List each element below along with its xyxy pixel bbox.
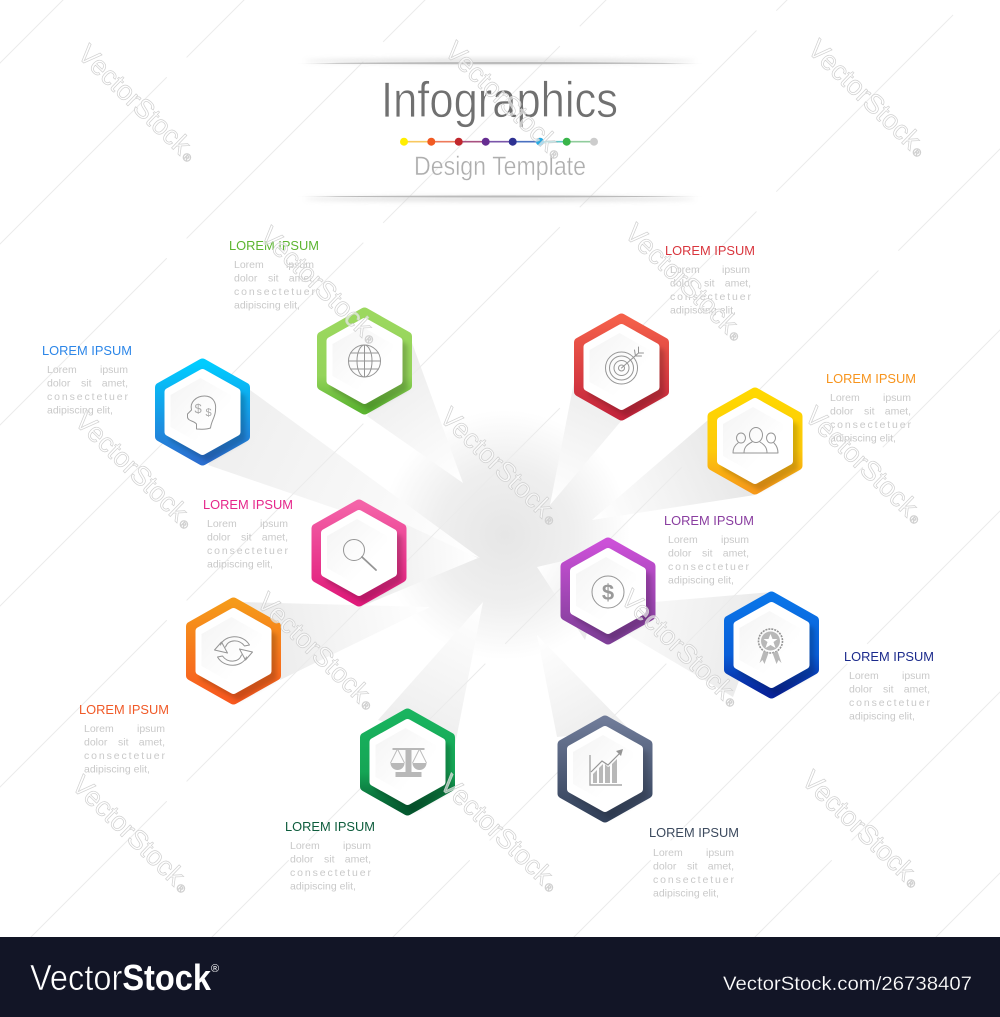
label: red: dolor	[670, 278, 694, 290]
footer logo: VectorStock	[30, 957, 212, 998]
label: purple	[664, 513, 754, 586]
label: navy: ipsum	[902, 670, 930, 682]
label: green: adipiscing elit,	[234, 300, 300, 312]
label: blue: amet,	[102, 378, 128, 390]
label: orange: ipsum	[137, 723, 165, 735]
label: orange: consectetuer	[84, 750, 166, 762]
label: dark green: amet,	[345, 854, 371, 866]
label: slate: adipiscing elit,	[653, 888, 719, 900]
label: purple: ipsum	[721, 534, 749, 546]
label: yellow: dolor	[830, 406, 854, 418]
watermarks: VectorStock®	[66, 770, 198, 898]
label: yellow: adipiscing elit,	[830, 432, 896, 444]
label: red	[665, 243, 755, 316]
label: orange: dolor	[84, 736, 108, 748]
label: green: consectetuer	[234, 286, 316, 298]
label: dark green: LOREM IPSUM	[285, 819, 375, 834]
label: green: ipsum	[286, 259, 314, 271]
hexagon: red, target	[579, 318, 664, 416]
watermarks: VectorStock®	[802, 34, 934, 162]
watermarks: VectorStock®	[615, 584, 747, 712]
top rule	[296, 58, 704, 64]
watermarks: VectorStock®	[434, 402, 566, 530]
label: yellow: LOREM IPSUM	[826, 371, 916, 386]
long shadows	[208, 340, 772, 745]
label: blue: ipsum	[100, 364, 128, 376]
hexagon: navy, medal	[729, 596, 814, 694]
label: red: Lorem	[670, 264, 700, 276]
label: pink	[203, 497, 293, 570]
label: red: ipsum	[722, 264, 750, 276]
hexagon: blue, money head	[160, 364, 245, 460]
label: pink: LOREM IPSUM	[203, 497, 293, 512]
label: slate: LOREM IPSUM	[649, 825, 739, 840]
label: orange: Lorem	[84, 723, 114, 735]
heading: Infographics: Infographics	[381, 72, 618, 128]
icon: people	[733, 428, 778, 453]
subheading: Design Template: Design Template	[414, 151, 586, 181]
label: navy: sit	[883, 684, 894, 696]
label: orange: adipiscing elit,	[84, 764, 150, 776]
label: blue: Lorem	[47, 364, 77, 376]
label: purple: adipiscing elit,	[668, 574, 734, 586]
label: purple: LOREM IPSUM	[664, 513, 754, 528]
label: pink: sit	[241, 532, 252, 544]
central shadow glow	[380, 410, 630, 660]
label: red: consectetuer	[670, 291, 752, 303]
label: slate: amet,	[708, 860, 734, 872]
label: yellow: amet,	[885, 406, 911, 418]
label: purple: sit	[702, 548, 713, 560]
watermarks: VectorStock®	[254, 221, 386, 349]
icon: head with dollars	[188, 396, 216, 429]
watermarks: VectorStock®	[69, 406, 201, 534]
label: pink: dolor	[207, 532, 231, 544]
icon: head with dollars: $	[194, 401, 202, 416]
icon: magnifier	[344, 540, 376, 570]
label: green: Lorem	[234, 259, 264, 271]
watermarks: VectorStock®	[796, 765, 928, 893]
footer id: VectorStock.com/26738407	[723, 974, 972, 995]
label: blue: dolor	[47, 378, 71, 390]
label: purple: consectetuer	[668, 561, 750, 573]
label: purple: dolor	[668, 548, 692, 560]
label: pink: consectetuer	[207, 545, 288, 557]
label: green: amet,	[289, 272, 315, 284]
label: blue: consectetuer	[47, 391, 128, 403]
label: dark green: Lorem	[290, 840, 320, 852]
label: yellow: sit	[864, 406, 875, 418]
label: navy	[844, 649, 934, 722]
label: orange: sit	[118, 736, 129, 748]
label: slate: ipsum	[706, 847, 734, 859]
label: navy: dolor	[849, 684, 873, 696]
label: pink: Lorem	[207, 518, 237, 530]
icon: target	[606, 347, 644, 384]
label: yellow	[826, 371, 916, 444]
label: orange	[79, 702, 169, 776]
label: purple: Lorem	[668, 534, 698, 546]
icon: growth chart	[590, 749, 623, 785]
label: blue	[42, 343, 132, 416]
watermarks	[66, 34, 934, 898]
watermarks: VectorStock®	[72, 39, 204, 167]
label: navy: LOREM IPSUM	[844, 649, 934, 664]
icon: medal	[758, 629, 782, 664]
registered mark: ®	[211, 963, 219, 975]
label: orange: LOREM IPSUM	[79, 702, 169, 717]
footer bar	[0, 937, 1000, 1017]
label: red: LOREM IPSUM	[665, 243, 755, 258]
hexagon: green, globe	[322, 312, 407, 410]
label: red: adipiscing elit,	[670, 304, 736, 316]
label: yellow: ipsum	[883, 392, 911, 404]
label: slate: Lorem	[653, 847, 683, 859]
watermarks: VectorStock®	[439, 36, 571, 164]
hexagon: yellow, people	[712, 392, 798, 490]
icon: head with dollars: $	[206, 407, 212, 419]
label: dark green	[285, 819, 375, 892]
watermarks: VectorStock®	[434, 769, 566, 897]
icon: scales	[390, 748, 426, 777]
colored dot line	[400, 138, 598, 146]
label: blue: adipiscing elit,	[47, 404, 113, 416]
bottom rule	[296, 196, 704, 202]
label: pink: ipsum	[260, 518, 288, 530]
label: yellow: Lorem	[830, 392, 860, 404]
label: slate	[649, 825, 739, 900]
label: navy: Lorem	[849, 670, 879, 682]
label: navy: amet,	[904, 684, 930, 696]
label: dark green: adipiscing elit,	[290, 880, 356, 892]
label: blue: LOREM IPSUM	[42, 343, 132, 358]
label: pink: adipiscing elit,	[207, 558, 273, 570]
label: pink: amet,	[262, 532, 288, 544]
label: blue: sit	[81, 378, 92, 390]
watermarks: VectorStock®	[251, 587, 383, 715]
hexagon: purple, dollar	[566, 542, 650, 640]
label: navy: adipiscing elit,	[849, 710, 915, 722]
label: green: sit	[268, 272, 279, 284]
label: orange: amet,	[139, 736, 165, 748]
label: slate: dolor	[653, 860, 677, 872]
label: dark green: sit	[324, 854, 335, 866]
title block	[296, 58, 704, 202]
label: dark green: dolor	[290, 854, 314, 866]
hexagon: pink, magnifier	[316, 504, 402, 602]
hexagon: orange, cycle	[191, 602, 276, 700]
label: red: sit	[704, 278, 715, 290]
label: green	[229, 238, 319, 312]
icon: cycle arrows	[214, 637, 252, 665]
label: green: LOREM IPSUM	[229, 238, 319, 253]
watermarks: VectorStock®	[619, 218, 751, 346]
label: dark green: consectetuer	[290, 867, 372, 879]
label: green: dolor	[234, 272, 258, 284]
label: slate: consectetuer	[653, 874, 734, 886]
hexagon: slate, growth chart	[562, 720, 648, 818]
label: slate: sit	[687, 860, 698, 872]
icon: globe	[348, 345, 380, 377]
watermarks: VectorStock®	[799, 401, 931, 529]
label: dark green: ipsum	[343, 840, 371, 852]
icon: dollar coin: $	[602, 580, 614, 605]
label: navy: consectetuer	[849, 697, 930, 709]
label: yellow: consectetuer	[830, 419, 912, 431]
label: red: amet,	[725, 278, 751, 290]
label: purple: amet,	[723, 548, 749, 560]
hexagon: dark green, scales	[365, 714, 450, 810]
